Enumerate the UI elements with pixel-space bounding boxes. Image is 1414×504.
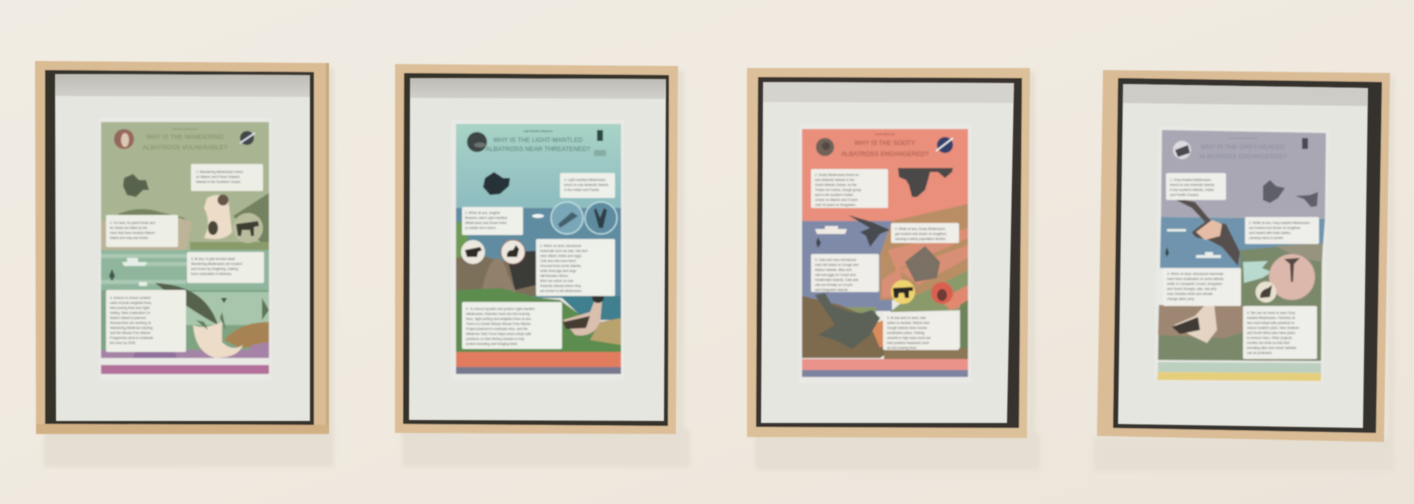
framed poster 2: light-mantled albatross bbox=[395, 64, 678, 434]
info box 2: get hooked and drown on longlines, bbox=[895, 232, 947, 236]
ice bbox=[1243, 261, 1272, 283]
info box 1: and in the southern Indian bbox=[815, 193, 853, 197]
distribution map bbox=[123, 174, 149, 197]
fish icon bbox=[109, 269, 115, 281]
threat icon: cat bbox=[501, 240, 525, 264]
info box 4: Programme aims to eradicate bbox=[110, 336, 153, 340]
info box 2 bbox=[891, 223, 959, 243]
info box 3: have been eradicated on some islands, bbox=[1167, 277, 1224, 281]
info box 4: action is needed. Marion and bbox=[887, 321, 930, 325]
wooden frame 1 bbox=[35, 61, 329, 434]
info box 1 bbox=[560, 173, 615, 198]
info box 4: 4. Actions to reduce seabird bbox=[110, 296, 151, 300]
info box 1: Just 15 years on Kerguelen. bbox=[815, 203, 856, 207]
mat board 2 bbox=[409, 78, 666, 421]
info box 1: Ocean on Marion and Crozet. bbox=[815, 198, 858, 202]
info box 4: Albatrosses, fisheries must use bird-scaring bbox=[466, 312, 530, 316]
info box 1: 1. Light-mantled Albatrosses bbox=[564, 178, 606, 182]
info box 4: can be protected. bbox=[1247, 351, 1273, 355]
diet circle bbox=[1269, 254, 1315, 300]
info box 4: 4. We can do much to save Grey- bbox=[1247, 311, 1296, 315]
info box 3: them vulnerable to fisheries. bbox=[191, 272, 232, 276]
info box 4: eradication plans. Fishing bbox=[887, 331, 925, 335]
info box 4: bird-scaring lines and night bbox=[110, 306, 149, 310]
sea bbox=[456, 208, 621, 298]
cliff slopes bbox=[880, 204, 968, 312]
info box 1: breed on sub-Antarctic islands bbox=[564, 183, 609, 187]
poster 4 title: Grey-Headed Albatross bbox=[1228, 136, 1258, 140]
poster 2 title: Light-Mantled Albatross bbox=[523, 129, 553, 133]
wooden frame 3 bbox=[747, 68, 1030, 438]
info box 4: Marion Island is planned. bbox=[110, 316, 147, 320]
info box 1: and Pacific Oceans. bbox=[1170, 193, 1199, 197]
info box 2: 2. While at sea, Grey-headed Albatrosses bbox=[1249, 221, 1310, 225]
bottom colour bars 3 bbox=[802, 359, 968, 377]
info box 3: mice attack chicks and eggs. bbox=[540, 254, 582, 258]
poster 2 title: WHY IS THE LIGHT-MANTLED bbox=[493, 137, 583, 144]
info box 3: Marion Islands. Mice and bbox=[815, 268, 852, 272]
info box 4: reduce seabird catch. New Zealand bbox=[1247, 326, 1299, 330]
land bbox=[1158, 243, 1322, 361]
info box 4: Project planned to eradicate mice, and the bbox=[466, 327, 528, 331]
coastal sea bbox=[560, 296, 621, 320]
info box 4 bbox=[106, 290, 186, 352]
info box 3: change alters prey. bbox=[1167, 297, 1195, 301]
info box 3: mice threaten birds and climate bbox=[1167, 292, 1213, 296]
info box 3: rats eat eggs on Crozet and bbox=[815, 273, 856, 277]
poster 1 title: Wandering Albatross bbox=[172, 127, 198, 131]
info box 4: practices on their fishing vessels to help bbox=[466, 337, 524, 341]
info box 3: Cats and rats have been bbox=[540, 259, 576, 263]
white egg shape bbox=[193, 322, 243, 358]
brown cliff bbox=[1158, 305, 1243, 338]
info box 2 bbox=[106, 215, 178, 247]
info box 4: lines, night-setting and weighted lines at sea. bbox=[466, 317, 532, 321]
nest soil bbox=[224, 322, 269, 348]
info box 3: while on Campbell, Crozet, Kerguelen bbox=[1167, 282, 1223, 286]
fish icon bbox=[816, 237, 821, 248]
info box 3: Amsterdam Islands. Cats and bbox=[815, 278, 858, 282]
threat icon: rat bbox=[931, 282, 953, 304]
info box 3 bbox=[536, 239, 615, 296]
poster 2 title: ALBATROSS NEAR THREATENED? bbox=[486, 146, 591, 153]
coastal green bbox=[456, 288, 621, 352]
poster 4 title: ALBATROSS ENDANGERED? bbox=[1199, 154, 1287, 160]
poster 2 bbox=[451, 120, 624, 380]
poster 3 title: Sooty Albatross bbox=[875, 132, 895, 136]
info box 4: as bird-scaring lines. bbox=[887, 346, 917, 350]
info box 4: breeding sites and ocean habitats bbox=[1247, 346, 1297, 350]
info box 3: 3. When on land, introduced bbox=[540, 244, 581, 248]
info box 4: the mice by 2025. bbox=[110, 341, 136, 345]
feather leaf bbox=[155, 283, 218, 325]
wooden frame 2 bbox=[395, 64, 678, 434]
info box 2: 2. When at sea, longline bbox=[465, 211, 501, 215]
info box 1: 1. Wandering Albatrosses breed bbox=[196, 170, 243, 174]
bottom colour bars 2 bbox=[456, 352, 621, 374]
threat icon: dog bbox=[461, 240, 485, 264]
framed poster 1: wandering albatross bbox=[35, 61, 329, 434]
info box 2: causing a steep population decline. bbox=[895, 237, 947, 241]
white fish bbox=[532, 214, 544, 218]
info box 4 bbox=[1243, 306, 1317, 359]
lower ground bbox=[802, 296, 968, 359]
wall shadows beneath the frames bbox=[44, 68, 1394, 471]
info box 1: breed on sub-Antarctic islands bbox=[1170, 183, 1215, 187]
underwater circle: seabird bbox=[551, 202, 583, 234]
sea bbox=[1160, 217, 1325, 268]
light-mantled albatross bbox=[563, 291, 621, 345]
poster 3 bbox=[799, 125, 971, 383]
info box 2: so adults don't return. bbox=[465, 226, 497, 230]
sea bbox=[802, 221, 892, 311]
info box 2: and hauled with trawl cables, bbox=[1249, 231, 1291, 235]
info box 1: 1. Sooty Albatrosses breed on bbox=[815, 173, 859, 177]
info box 1 bbox=[1166, 173, 1226, 200]
info box 3: mice kill chicks on Gough and bbox=[815, 263, 859, 267]
distribution map bbox=[483, 172, 510, 195]
Africa map bbox=[898, 168, 953, 197]
info box 4: sea must adopt safe practices to bbox=[1247, 321, 1295, 325]
poster 3 title bbox=[841, 132, 929, 158]
info box 2: fisheries catch Light-mantled bbox=[465, 216, 507, 220]
header portrait icon bbox=[1173, 141, 1191, 159]
poster 2 title bbox=[486, 129, 591, 153]
header logo bbox=[594, 130, 606, 156]
poster 1 title: ALBATROSS VULNERABLE? bbox=[143, 144, 228, 152]
info box 4: monitor the birds so that their bbox=[1247, 341, 1291, 345]
threat icon: cat bbox=[891, 280, 915, 304]
info box 1: on Marion and Prince Edward bbox=[196, 175, 240, 179]
info box 3: and Kerguelen Islands. bbox=[815, 288, 849, 292]
info box 2 bbox=[462, 207, 523, 235]
bottom colour bar 1 bbox=[101, 365, 269, 374]
underwater circle: birds bbox=[585, 202, 617, 234]
info box 1: sub-Antarctic islands in the bbox=[815, 178, 855, 182]
info box 2: 2. On land, its parent birds and bbox=[110, 221, 155, 225]
info box 2: its chicks are killed by the bbox=[110, 226, 148, 230]
info box 4 bbox=[883, 312, 959, 350]
info box 3: Antarctic islands where they bbox=[540, 284, 581, 288]
mat board 4 bbox=[1118, 84, 1368, 428]
hills and shore bbox=[101, 193, 269, 250]
fish icon bbox=[1165, 247, 1169, 257]
wooden frame 4 bbox=[1097, 70, 1390, 442]
info box 4 bbox=[462, 302, 562, 349]
header portrait icon bbox=[816, 138, 834, 156]
header logo icon bbox=[240, 131, 255, 145]
info box 3: and drown by longlining, making bbox=[191, 267, 238, 271]
info box 1: Tristan da Cunha, Gough group bbox=[815, 188, 861, 192]
info box 4: Wandering Albatross tracking bbox=[110, 326, 153, 330]
info box 4: and the Mouse-Free Marion bbox=[110, 331, 151, 335]
info box 3 bbox=[1163, 268, 1241, 306]
info box 3: 3. When on land, introduced mammals bbox=[1167, 272, 1224, 276]
info box 4: headed Albatrosses. Fisheries at bbox=[1247, 316, 1295, 320]
info box 3: and South Georgia, cats, rats and bbox=[1167, 287, 1216, 291]
info box 3: still threaten others. bbox=[540, 274, 569, 278]
info box 4: setting. Mice eradication on bbox=[110, 311, 150, 315]
info box 3: 3. Cats and mice introduced bbox=[815, 258, 856, 262]
distribution map Antarctica bbox=[1263, 180, 1285, 203]
info box 4: 4. To reduce bycatch and protect Light-mantled bbox=[466, 307, 535, 311]
info box 3: 3. At sea, in pair-bonded adult bbox=[191, 257, 235, 261]
poster 4 title bbox=[1199, 136, 1287, 160]
info box 3: Wandering Albatrosses are hooked bbox=[191, 262, 242, 266]
nesting albatross bbox=[1174, 303, 1217, 343]
sooty albatross in flight bbox=[848, 215, 890, 247]
grey-headed albatross in flight bbox=[1170, 197, 1240, 266]
info box 2: are hooked and drown on longlines bbox=[1249, 226, 1301, 230]
info box 1: Islands in the Southern Ocean. bbox=[196, 180, 241, 184]
poster 3 title: WHY IS THE SOOTY bbox=[855, 140, 915, 147]
info box 1: in the southern Atlantic, Indian bbox=[1170, 188, 1214, 192]
info box 4: Albatross Task Force helps crews adopt safe bbox=[466, 332, 532, 336]
info box 4: Researchers are working on bbox=[110, 321, 151, 325]
fishing vessels bbox=[1167, 229, 1221, 258]
distribution map South America bbox=[1295, 192, 1318, 207]
wandering albatross with chick bbox=[204, 194, 232, 239]
fishing vessel bbox=[122, 258, 147, 266]
info box 2: causing many to perish. bbox=[1249, 236, 1284, 240]
info box 4: best practice measures such bbox=[887, 341, 929, 345]
header portrait icon bbox=[467, 132, 487, 152]
info box 4: catch include weighted lines, bbox=[110, 301, 152, 305]
info box 1 bbox=[191, 164, 263, 191]
mat board 1 bbox=[55, 74, 310, 421]
ocean band bbox=[101, 250, 269, 294]
header portrait icon bbox=[114, 129, 134, 149]
info box 4: 4. At sea and on land, vital bbox=[887, 316, 926, 320]
seal on nest mound bbox=[482, 258, 516, 292]
poster 4 title: WHY IS THE GREY-HEADED bbox=[1201, 144, 1286, 151]
info box 3: are known to kill albatrosses. bbox=[540, 289, 582, 293]
info box 2: 2. While at sea, Sooty Albatrosses bbox=[895, 227, 945, 231]
poster 1 title: WHY IS THE WANDERING bbox=[146, 134, 224, 141]
poster 3 title: ALBATROSS ENDANGERED? bbox=[841, 151, 929, 158]
threat icon: feral cattle bbox=[233, 213, 263, 243]
info box 2 bbox=[1245, 217, 1319, 244]
albatross on cliff bbox=[905, 246, 940, 282]
grass blades bbox=[196, 298, 269, 330]
info box 1: 1. Grey-headed Albatrosses bbox=[1170, 178, 1211, 182]
header logo icon bbox=[936, 137, 953, 153]
header logo icon bbox=[1302, 138, 1308, 149]
info box 4: protect breeding and foraging birds. bbox=[466, 342, 518, 346]
poster 4 bbox=[1154, 127, 1329, 383]
info box 2: mice that have invaded Marion bbox=[110, 231, 155, 235]
info box 3: rats are threats on Crozet bbox=[815, 283, 852, 287]
info box 3 bbox=[811, 254, 879, 292]
info box 1: in the Indian and Pacific. bbox=[564, 188, 600, 192]
poster 1 bbox=[99, 118, 271, 380]
info box 2: Island and may eat chicks. bbox=[110, 236, 149, 240]
poster 1 title bbox=[143, 127, 228, 152]
info box 3: mammals such as cats, rats and bbox=[540, 249, 587, 253]
framed poster 3: sooty albatross bbox=[747, 68, 1030, 438]
info box 2: Albatrosses and drown them bbox=[465, 221, 507, 225]
info box 3: Mice are active on sub- bbox=[540, 279, 574, 283]
info box 4: to remove mice. Other projects bbox=[1247, 336, 1292, 340]
lower landscape bbox=[101, 290, 269, 358]
info box 3: while feral pigs and dogs bbox=[540, 269, 577, 273]
info box 4: There is a South African Mouse-Free Marion bbox=[466, 322, 531, 326]
info box 1 bbox=[811, 169, 888, 208]
sooty albatross on nest bbox=[815, 293, 880, 349]
info box 3: removed from some islands, bbox=[540, 264, 581, 268]
framed poster 4: grey-headed albatross bbox=[1097, 70, 1390, 442]
info box 4: and South Africa also have plans bbox=[1247, 331, 1295, 335]
mat board 3 bbox=[761, 82, 1014, 423]
bottom colour bars 4 bbox=[1157, 362, 1321, 381]
info box 3 bbox=[187, 252, 264, 283]
threat icon: rat bbox=[1256, 282, 1276, 302]
info box 4: Gough Islands have mouse bbox=[887, 326, 927, 330]
left vegetation and land bbox=[456, 222, 536, 296]
info box 4: vessels in high seas must use bbox=[887, 336, 931, 340]
fishing vessel bbox=[815, 226, 847, 234]
info box 1: South Atlantic Ocean, on the bbox=[815, 183, 857, 187]
